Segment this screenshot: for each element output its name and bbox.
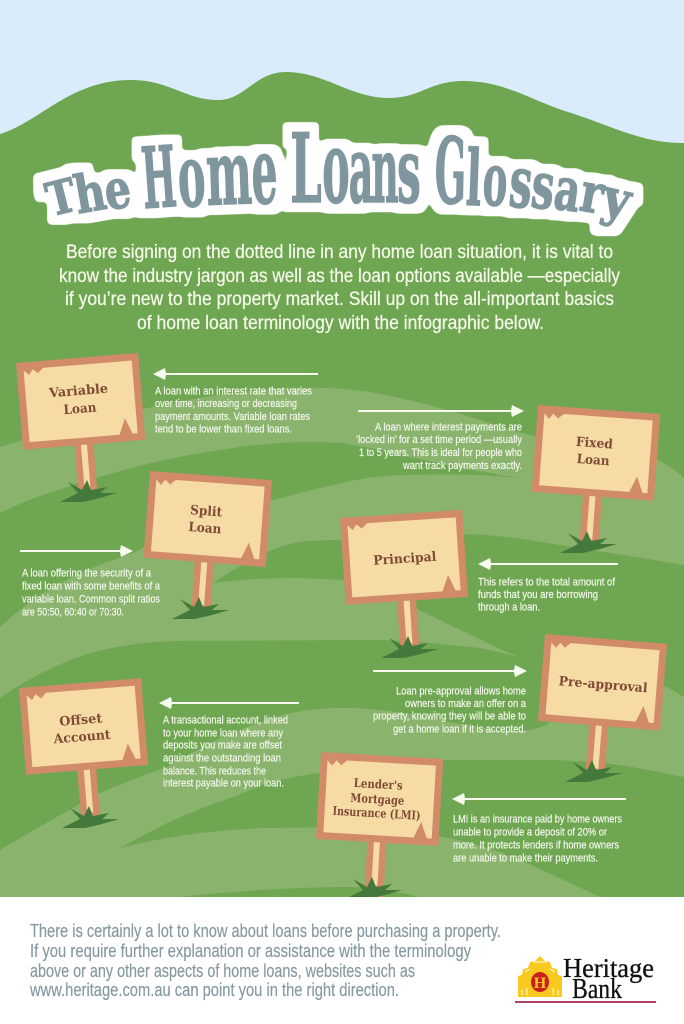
icon: grass, Principal — [381, 636, 438, 658]
light hill band: upper — [0, 388, 684, 698]
sky background — [0, 0, 684, 300]
sign: Lender's Mortgage Insurance: Mortgage — [350, 791, 405, 808]
arrow: Variable Loan — [153, 368, 318, 380]
sign: Variable Loan: Loan — [63, 401, 98, 418]
text: Offset Account definition: balance. This reduces the — [163, 766, 266, 778]
light hill band: lower — [0, 680, 684, 897]
text: Split Loan definition: A loan offering the security of a — [22, 568, 152, 580]
text: Variable Loan definition — [155, 386, 312, 436]
text: Pre-approval definition — [373, 686, 527, 736]
intro text — [59, 241, 620, 334]
title: o — [175, 125, 208, 227]
icon: crest: H — [534, 975, 547, 992]
title — [41, 109, 638, 232]
arrow: Fixed Loan — [358, 405, 524, 417]
text: Variable Loan definition: payment amounts. Variable loan rates — [155, 411, 310, 423]
logo: Heritage Bank: Heritage — [563, 953, 654, 983]
title: s — [397, 120, 421, 224]
title: y — [596, 166, 638, 232]
icon: grass, Split Loan — [172, 597, 229, 619]
title: r — [576, 160, 610, 227]
arrow: LMI — [452, 793, 626, 805]
sign: Offset Account — [19, 678, 152, 822]
intro text: know the industry jargon as well as the loan options available —especially — [59, 265, 620, 287]
text: Variable Loan definition: A loan with an interest rate that varies — [155, 386, 312, 398]
title: G — [434, 119, 467, 226]
intro text: of home loan terminology with the infographic below. — [137, 312, 544, 334]
icon: crest — [518, 956, 562, 997]
title: m — [204, 121, 254, 226]
logo: Heritage Bank: Bank — [572, 973, 622, 1005]
sign: Split Loan: Loan — [188, 520, 222, 538]
title: e — [100, 157, 135, 223]
text: Split Loan definition: are 50:50, 60:40 or 70:30. — [22, 606, 124, 618]
icon: grass, Fixed Loan — [560, 531, 617, 553]
text: LMI definition: unable to provide a deposit of 20% or — [453, 826, 607, 838]
text: Offset Account definition: against the outstanding loan — [163, 752, 281, 764]
title: a — [550, 154, 585, 226]
text: Fixed Loan definition: 1 to 5 years. This is ideal for people who — [359, 447, 522, 459]
text: Split Loan definition — [22, 568, 161, 618]
text: LMI definition: more. It protects lenders if home owners — [453, 840, 619, 852]
text: Offset Account definition: to your home loan where any — [163, 728, 283, 740]
text: Pre-approval definition: Loan pre-approval allows home — [396, 686, 526, 698]
text: LMI definition: are unable to make their payments. — [453, 852, 598, 864]
sign: Principal — [340, 510, 471, 652]
text: LMI definition: LMI is an insurance paid by home owners — [453, 814, 622, 826]
text: Variable Loan definition: over time, increasing or decreasing — [155, 398, 297, 410]
arrow: Offset Account — [159, 697, 299, 709]
sign: Principal: Principal — [373, 550, 437, 569]
icon: grass, LMI — [345, 877, 402, 899]
title: s — [528, 147, 558, 225]
icon: grass, Offset Account — [62, 806, 119, 828]
title: e — [251, 118, 278, 225]
text: Offset Account definition: A transactional account, linked — [163, 714, 288, 726]
sign: Pre-approval — [534, 634, 667, 777]
arrow: Principal — [478, 558, 618, 570]
sign: Split Loan: Split — [190, 503, 223, 520]
footer panel — [0, 897, 684, 1024]
footer text — [29, 920, 501, 1000]
title: o — [481, 136, 510, 223]
footer text: If you require further explanation or assistance with the terminology — [30, 940, 472, 961]
text: Pre-approval definition: property, knowing they will be able to — [373, 710, 526, 722]
sign: Variable Loan — [16, 353, 149, 497]
intro text: Before signing on the dotted line in any home loan situation, it is vital to — [66, 241, 613, 263]
title: s — [506, 140, 536, 225]
sign: Lender's Mortgage Insurance — [312, 752, 443, 909]
sign: Offset Account: Offset — [59, 711, 103, 730]
text: Split Loan definition: fixed loan with some benefits of a — [22, 580, 161, 592]
sign: Fixed Loan: Loan — [576, 452, 611, 469]
title: o — [322, 109, 350, 226]
text: Fixed Loan definition: ‘locked in’ for a set time period —usually — [356, 434, 522, 446]
text: Fixed Loan definition: want track payments exactly. — [402, 460, 522, 472]
text: Pre-approval definition: get a home loan if it is accepted. — [393, 724, 526, 736]
logo: Heritage Bank — [515, 953, 656, 1005]
text: Principal definition: funds that you are borrowing — [478, 589, 598, 601]
sign: Variable Loan: Variable — [48, 382, 109, 401]
text: Principal definition: This refers to the total amount of — [478, 576, 616, 588]
sign: Offset Account: Account — [52, 728, 111, 747]
sign: Fixed Loan — [528, 405, 660, 548]
footer text: above or any other aspects of home loans, websites such as — [30, 960, 415, 981]
title: h — [69, 161, 110, 227]
text: Fixed Loan definition: A loan where interest payments are — [375, 422, 522, 434]
footer text: www.heritage.com.au can point you in the right direction. — [29, 979, 399, 1000]
text: Offset Account definition: deposits you make are offset — [163, 740, 283, 752]
sign: Split Loan — [140, 471, 272, 614]
icon: grass, Variable Loan — [60, 480, 117, 502]
arrow: Pre-approval — [373, 665, 527, 677]
title: T — [41, 169, 82, 228]
sign: Lender's Mortgage Insurance: Insurance (LMI) — [332, 804, 421, 823]
text: Split Loan definition: variable loan. Common split ratios — [22, 594, 160, 606]
title: l — [465, 132, 483, 224]
sign: Fixed Loan: Fixed — [575, 435, 613, 453]
sign: Pre-approval: Pre-approval — [558, 674, 648, 696]
text: LMI definition — [453, 814, 622, 864]
title: n — [371, 118, 399, 224]
text: Offset Account definition: interest payable on your loan. — [163, 778, 284, 790]
text: Principal definition: through a loan. — [478, 602, 540, 614]
sign: Lender's Mortgage Insurance: Lender's — [353, 776, 403, 793]
arrow: Split Loan — [20, 545, 133, 557]
text: Pre-approval definition: owners to make an offer on a — [405, 698, 527, 710]
footer text: There is certainly a lot to know about loans before purchasing a property. — [30, 920, 501, 941]
text: Fixed Loan definition — [356, 422, 522, 472]
intro text: if you’re new to the property market. Skill up on the all-important basics — [65, 288, 614, 310]
text: Offset Account definition — [163, 714, 288, 790]
text: Principal definition — [478, 576, 616, 614]
title: a — [349, 116, 373, 224]
title: H — [139, 128, 179, 229]
icon: grass, Pre-approval — [565, 760, 622, 782]
text: Variable Loan definition: tend to be lower than fixed loans. — [155, 424, 292, 436]
title: L — [290, 112, 322, 225]
